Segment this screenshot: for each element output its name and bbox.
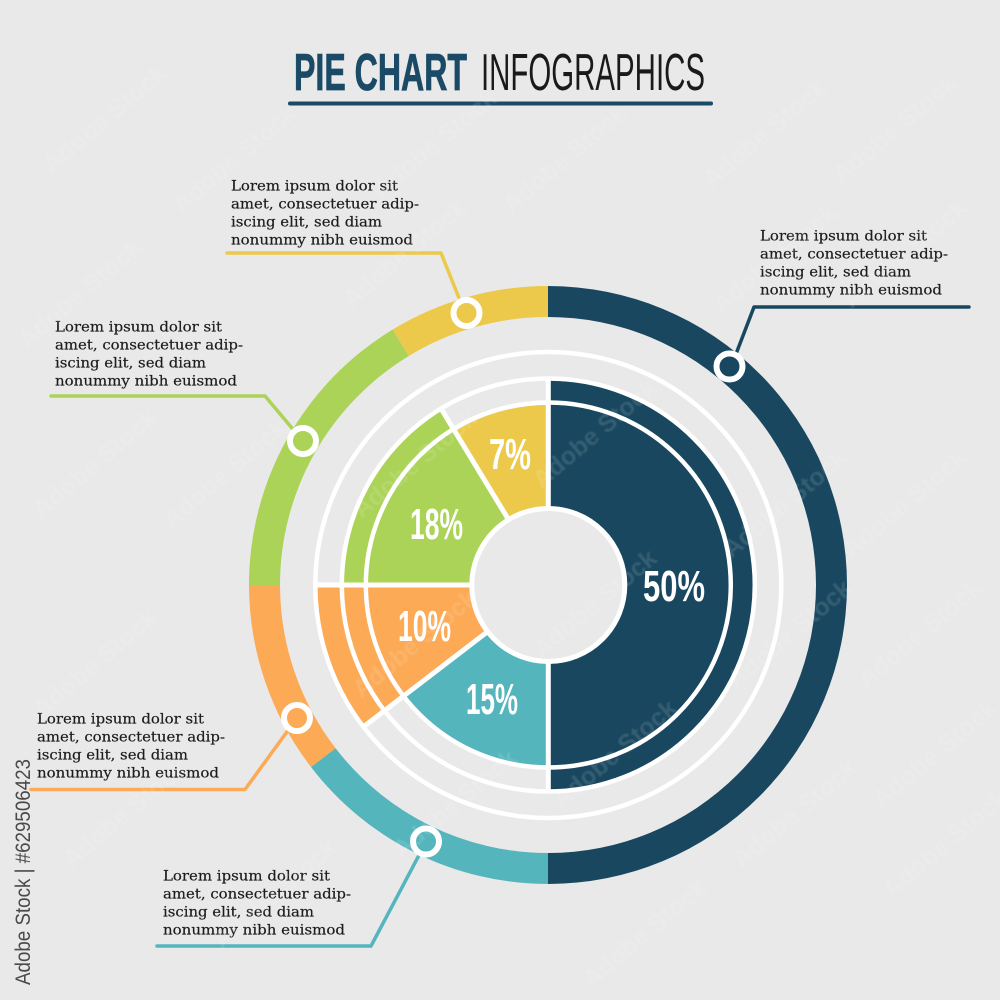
center hole bbox=[472, 508, 625, 662]
watermark pattern: Adobe Stock bbox=[27, 404, 162, 524]
watermark pattern: Adobe Stock bbox=[722, 574, 857, 694]
callout: dark blue: Lorem ipsum dolor sit bbox=[760, 228, 927, 244]
watermark pattern: Adobe Stock bbox=[57, 754, 192, 874]
watermark pattern: Adobe Stock bbox=[852, 574, 987, 694]
callout: teal: iscing elit, sed diam bbox=[163, 904, 314, 920]
watermark pattern: Adobe Stock bbox=[717, 444, 852, 564]
watermark pattern: Adobe Stock bbox=[37, 59, 172, 179]
segment: 18% bbox=[343, 410, 509, 585]
segment: 50% bbox=[548, 380, 753, 790]
segment: 15% bbox=[405, 631, 548, 766]
watermark pattern: Adobe Stock bbox=[157, 414, 292, 534]
watermark pattern: Adobe Stock bbox=[837, 194, 972, 314]
callout: teal: amet, consectetuer adip- bbox=[163, 886, 351, 902]
callout: orange: amet, consectetuer adip- bbox=[37, 730, 225, 746]
watermark pattern: Adobe Stock bbox=[167, 99, 302, 219]
watermark pattern: Adobe Stock bbox=[207, 834, 342, 954]
segment: 10% bbox=[317, 585, 488, 726]
callout: yellow bbox=[227, 178, 480, 326]
callout: green: amet, consectetuer adip- bbox=[55, 338, 243, 354]
watermark pattern: Adobe Stock bbox=[827, 69, 962, 189]
percentage labels bbox=[398, 430, 705, 724]
callout: green: nonummy nibh euismod bbox=[55, 374, 237, 390]
callout: orange bbox=[31, 705, 310, 790]
callout: green: Lorem ipsum dolor sit bbox=[55, 320, 222, 336]
callout: dark blue: amet, consectetuer adip- bbox=[760, 246, 948, 262]
watermark pattern: Adobe Stock bbox=[727, 754, 862, 874]
callout: teal: Lorem ipsum dolor sit bbox=[163, 868, 330, 884]
watermark pattern: Adobe Stock bbox=[387, 744, 522, 864]
watermark pattern: Adobe Stock bbox=[547, 694, 682, 814]
watermark pattern: Adobe Stock bbox=[347, 404, 482, 524]
callout: orange: Lorem ipsum dolor sit bbox=[37, 712, 204, 728]
percentage labels: 7% bbox=[489, 430, 531, 479]
percentage labels: 10% bbox=[398, 602, 451, 651]
outer ring chart bbox=[249, 286, 847, 884]
callout: dark blue: nonummy nibh euismod bbox=[760, 282, 942, 298]
callout: teal: nonummy nibh euismod bbox=[163, 922, 345, 938]
side stock credit: Adobe Stock | #629506423 bbox=[12, 759, 35, 985]
callout: dark blue bbox=[716, 228, 969, 380]
title: INFOGRAPHICS bbox=[481, 44, 705, 102]
callout: yellow: amet, consectetuer adip- bbox=[231, 196, 419, 212]
watermark pattern: Adobe Stock bbox=[577, 874, 712, 994]
callout: yellow: Lorem ipsum dolor sit bbox=[231, 178, 398, 194]
callout: green bbox=[51, 320, 316, 454]
watermark pattern: Adobe Stock bbox=[837, 444, 972, 564]
watermark pattern: Adobe Stock bbox=[347, 584, 482, 704]
percentage labels: 15% bbox=[466, 675, 518, 724]
callout: yellow: nonummy nibh euismod bbox=[231, 232, 413, 248]
callout: dark blue: iscing elit, sed diam bbox=[760, 264, 911, 280]
percentage labels: 50% bbox=[643, 562, 705, 611]
watermark pattern: Adobe Stock bbox=[12, 234, 147, 354]
callout: teal bbox=[157, 828, 439, 946]
segment: 7% bbox=[455, 405, 548, 520]
callout: yellow: iscing elit, sed diam bbox=[231, 214, 382, 230]
watermark pattern: Adobe Stock bbox=[697, 74, 832, 194]
watermark pattern: Adobe Stock bbox=[27, 604, 162, 724]
callout: orange: nonummy nibh euismod bbox=[37, 766, 219, 782]
title: PIE CHART bbox=[294, 44, 467, 102]
percentage labels: 18% bbox=[410, 500, 463, 549]
title bbox=[294, 44, 705, 102]
watermark pattern: Adobe Stock bbox=[337, 194, 472, 314]
watermark pattern: Adobe Stock bbox=[867, 694, 1000, 814]
watermark pattern: Adobe Stock bbox=[527, 544, 662, 664]
donut chart bbox=[315, 352, 781, 818]
watermark pattern: Adobe Stock bbox=[497, 99, 632, 219]
watermark pattern: Adobe Stock bbox=[527, 374, 662, 494]
watermark pattern: Adobe Stock bbox=[707, 199, 842, 319]
watermark pattern: Adobe Stock bbox=[367, 84, 502, 204]
callout: green: iscing elit, sed diam bbox=[55, 356, 206, 372]
title underline bbox=[290, 102, 711, 106]
callout: orange: iscing elit, sed diam bbox=[37, 748, 188, 764]
